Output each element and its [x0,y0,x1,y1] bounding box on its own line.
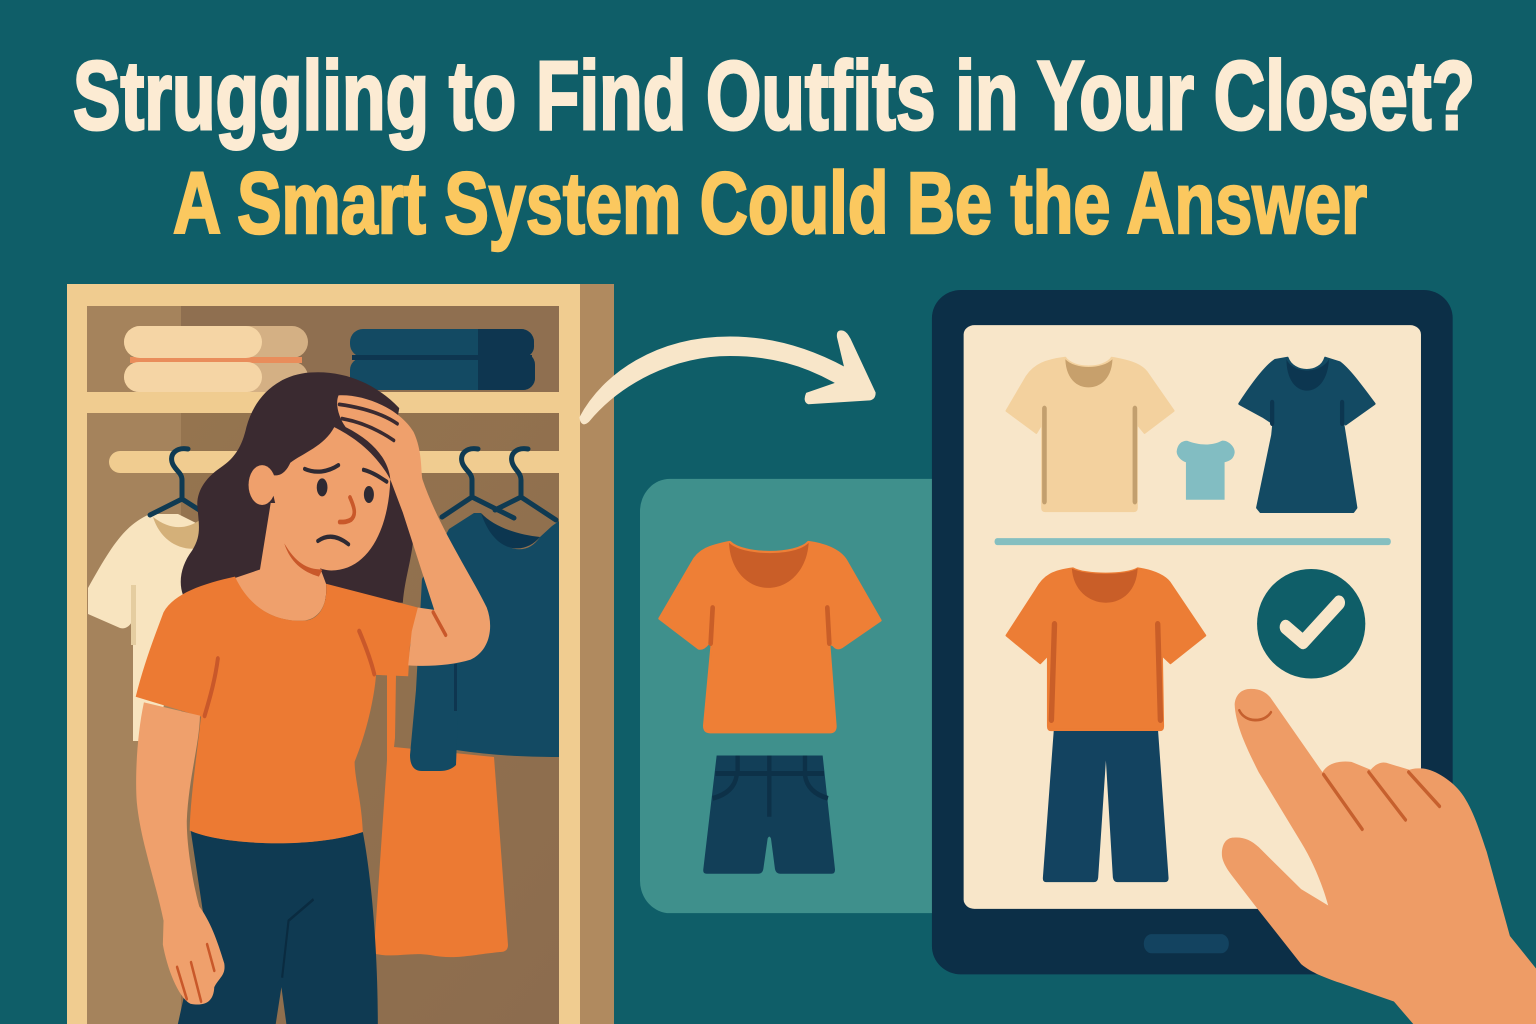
folded navy towels [350,329,535,390]
selected orange t-shirt [1007,569,1205,730]
tablet [932,290,1536,1024]
tablet screen [964,325,1421,909]
orange dress hanging [374,674,508,957]
pants [178,831,378,1024]
navy shorts [703,756,835,874]
small blue t-shirt [1177,441,1235,500]
pointing hand [1222,689,1536,1024]
cream shirt on hanger [88,514,200,741]
lowered arm and hand [136,702,225,1005]
hair [181,372,414,603]
upper compartment [87,306,559,392]
closet side panel [580,284,614,1024]
panel: outfit suggestion [640,479,973,913]
shirt [136,577,418,843]
face details [305,465,387,544]
neck shadow [284,543,322,577]
divider line [995,538,1391,545]
teal card [640,479,973,913]
home button [1144,934,1229,953]
lower compartment [87,413,559,1024]
folded cream towels [124,326,308,392]
navy shirt on hanger [410,513,559,771]
check mark badge [1257,569,1365,679]
arrow [580,331,875,424]
ear [249,465,276,505]
title [73,41,1475,252]
raised arm and hand [337,395,490,666]
panel: closet [67,284,614,1024]
hanger left [150,449,204,515]
orange t-shirt [659,542,881,732]
selected navy pants [1043,731,1169,882]
face [271,427,390,570]
closet frame [67,284,580,1024]
tablet body [932,290,1453,974]
beige t-shirt [1007,358,1174,511]
neck [235,503,326,621]
hangers right [442,449,556,520]
clothes rail [109,451,559,473]
woman [136,372,490,1024]
navy dress [1239,358,1375,512]
